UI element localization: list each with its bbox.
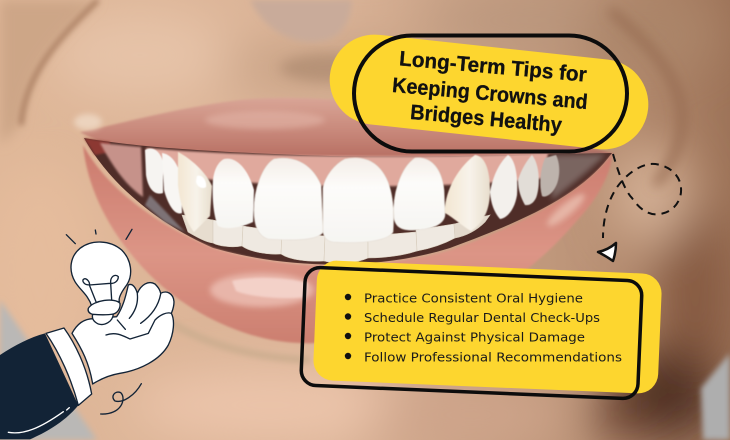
gums: [146, 148, 548, 186]
tips list: Schedule Regular Dental Check-Ups: [364, 310, 600, 325]
grey shadow behind teeth: [145, 195, 185, 232]
sleeve highlight: [8, 408, 69, 433]
dashed looping arrow: [598, 154, 681, 261]
upper lip shine: [205, 111, 325, 129]
tooth highlight: [196, 176, 206, 188]
panel yellow box: [313, 260, 662, 394]
dark cheek right: [550, 154, 606, 200]
title yellow band: [325, 30, 653, 154]
grey backdrop lower-right: [701, 353, 730, 440]
squiggle: [101, 384, 141, 414]
shadow under lower lip: [170, 322, 310, 360]
lower lip: [83, 145, 612, 343]
tips list: Protect Against Physical Damage: [364, 330, 585, 344]
nose shadow: [281, 52, 338, 84]
tips list: Follow Professional Recommendations: [364, 350, 622, 364]
sleeve: [0, 333, 78, 439]
arrow head: [598, 243, 616, 261]
panel black outline: [301, 267, 642, 399]
hand: [72, 283, 174, 384]
tips list: [345, 290, 622, 364]
right lip highlight: [546, 192, 586, 228]
bulb filament: [83, 275, 118, 303]
upper lip: [80, 98, 616, 161]
finger lines: [106, 294, 171, 339]
mouth corner: [84, 138, 110, 155]
title text: Long-Term Tips for: [398, 47, 588, 87]
arrow line: [603, 154, 681, 238]
lip corner highlight: [74, 114, 102, 130]
title badge: [325, 30, 653, 154]
title text: Bridges Healthy: [409, 101, 563, 137]
title text: Keeping Crowns and: [391, 74, 589, 114]
tips panel: [301, 260, 662, 399]
bulb base: [88, 300, 120, 324]
bulb: [71, 242, 131, 306]
title black outline: [354, 36, 627, 152]
cheek fold left: [0, 0, 88, 137]
lower lip highlights: [210, 273, 314, 307]
inner cheek: [100, 143, 143, 197]
grey backdrop lower-left: [0, 300, 97, 440]
lower teeth: [182, 215, 490, 263]
tips list: Practice Consistent Oral Hygiene: [364, 290, 583, 306]
cheek crease right: [610, 10, 682, 185]
upper teeth: [145, 148, 559, 243]
cuff: [46, 328, 92, 405]
nose tip: [250, 0, 352, 42]
lower lip bright gloss: [232, 278, 308, 298]
mouth interior: [84, 138, 612, 264]
illustration: hand holding light bulb: [0, 229, 174, 439]
light rays: [66, 229, 132, 244]
title text: [391, 47, 589, 137]
